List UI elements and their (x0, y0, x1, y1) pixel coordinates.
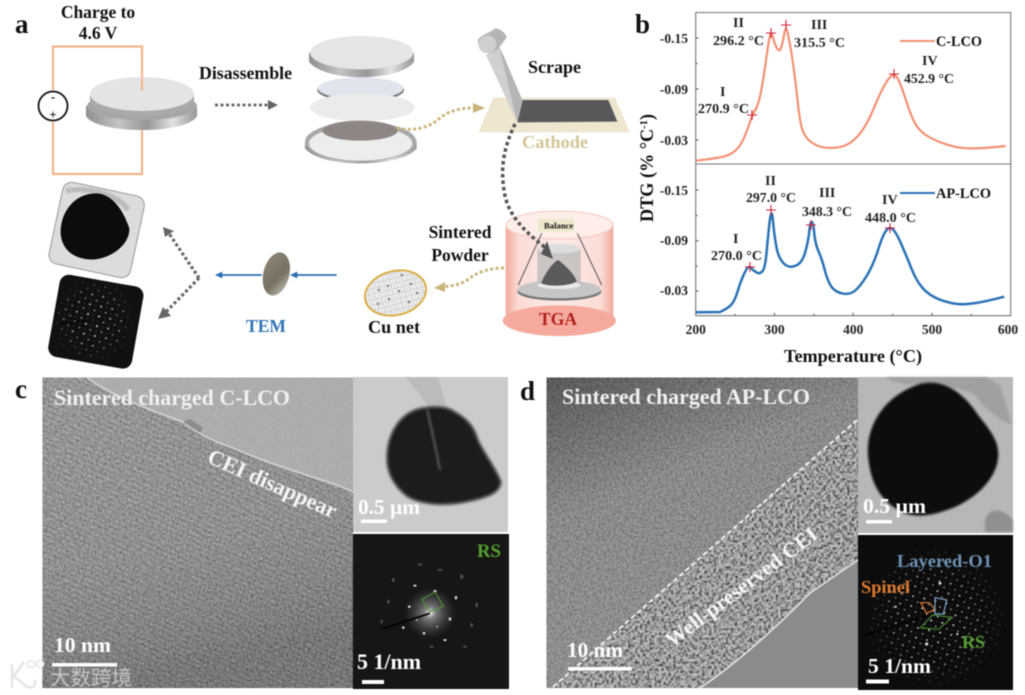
y axis title: ) (637, 114, 658, 120)
annotation: CEI disappear: CEI disappear (204, 444, 341, 523)
label: TEM: TEM (246, 316, 286, 336)
x axis labels: 500 (922, 322, 942, 337)
peak labels: C-LCO: II (733, 16, 744, 31)
inset: AP-LCO diffraction: 5 1/nm (868, 654, 931, 678)
caption: Sintered charged AP-LCO: Sintered charged AP-LCO (562, 385, 810, 409)
peak labels: AP-LCO: 348.3 °C (802, 205, 852, 220)
legend: AP-LCO: AP-LCO (936, 186, 991, 202)
label: Sintered Powder: Sintered (429, 222, 492, 242)
scale bar: 10 nm (52, 633, 117, 666)
peak markers (745, 20, 899, 272)
peak labels: C-LCO: 270.9 °C (698, 102, 749, 117)
axis ticks (696, 38, 971, 316)
arrow: powder to Cu net (434, 268, 504, 292)
peak labels: C-LCO: IV (922, 54, 938, 69)
peak labels: C-LCO: I (720, 85, 725, 100)
panel label d: d (520, 376, 535, 406)
inset: AP-LCO diffraction: Layered-O1 (897, 551, 992, 571)
inset: AP-LCO particle: 0.5 µm (863, 494, 927, 518)
y axis labels: -0.15 (660, 183, 688, 198)
peak labels: AP-LCO: IV (882, 193, 898, 208)
icon: voltage source (38, 89, 68, 122)
peak labels: AP-LCO: II (765, 174, 776, 189)
series: C-LCO curve (696, 29, 1006, 161)
annotation: Well-preserved CEI: Well-preserved CEI (661, 522, 822, 652)
y axis title: -1 (638, 120, 650, 129)
y axis labels: -0.03 (660, 133, 688, 148)
peak labels: AP-LCO: 270.0 °C (711, 249, 762, 264)
inset: AP-LCO diffraction: RS (962, 632, 985, 652)
icon: exploded coin cell (305, 36, 417, 163)
peak labels: AP-LCO: 448.0 °C (865, 211, 916, 226)
caption: Sintered charged C-LCO: Sintered charged C-LCO (54, 385, 290, 410)
watermark logo and text (12, 660, 132, 691)
icon: voltage source: - (51, 89, 55, 104)
peak labels: AP-LCO (711, 174, 916, 264)
panel: b DTG chart (635, 9, 1018, 367)
icon: Cu net (360, 264, 431, 322)
scale bar: 10 nm (567, 638, 632, 670)
label: Sintered Powder: Powder (431, 245, 489, 265)
x axis labels: 200 (686, 322, 706, 337)
label: Scrape: Scrape (528, 57, 581, 77)
y axis labels: -0.09 (660, 82, 688, 97)
y axis labels: -0.15 (660, 31, 688, 46)
arrows: TEM outputs (158, 227, 199, 319)
label: TGA: TGA (539, 309, 577, 329)
peak labels: C-LCO: 452.9 °C (904, 72, 954, 87)
scale bar: 10 nm: 10 nm (567, 638, 623, 662)
peak labels: AP-LCO: III (819, 186, 835, 201)
heading: Charge to 4.6 V: Charge to (61, 2, 135, 22)
circuit wire (53, 46, 142, 174)
peak labels: AP-LCO: 297.0 °C (746, 191, 796, 206)
legend: C-LCO: C-LCO (936, 34, 982, 50)
legend: C-LCO (900, 34, 982, 50)
icon: coin cell (86, 77, 197, 130)
x axis labels: 300 (764, 322, 785, 337)
peak labels: C-LCO: 296.2 °C (713, 34, 764, 49)
scale bar: 10 nm: 10 nm (54, 633, 111, 657)
icon: scraper and cathode sheet (478, 28, 630, 132)
icon: TGA instrument: Balance (544, 220, 573, 230)
peak labels: C-LCO (698, 16, 954, 117)
y axis labels: -0.03 (660, 283, 688, 298)
inset: C-LCO diffraction: 5 1/nm (357, 649, 421, 674)
panel: d AP-LCO micrographs (520, 376, 1013, 690)
legend: AP-LCO (900, 186, 991, 202)
y axis title: DTG (% °C (637, 125, 658, 222)
x axis title: Temperature (°C) (784, 346, 922, 367)
arrow: cathode to balance (503, 124, 553, 259)
x axis labels: 400 (843, 322, 864, 337)
micrograph: HRTEM AP-LCO (546, 378, 858, 688)
label: Sintered Powder (429, 222, 492, 265)
label: Cu net: Cu net (368, 317, 420, 337)
panel label b: b (635, 9, 650, 39)
inset: C-LCO particle: 0.5 µm (358, 495, 421, 519)
series: AP-LCO curve (696, 214, 1004, 312)
heading: Charge to 4.6 V: 4.6 V (79, 23, 118, 43)
icon: voltage source: + (49, 107, 57, 122)
x axis labels (686, 322, 1018, 337)
y axis labels: -0.09 (660, 233, 688, 248)
x axis labels: 600 (998, 322, 1018, 337)
icon: TGA instrument (503, 211, 616, 336)
icon: TEM beam and lens (215, 250, 337, 298)
y axis labels (660, 31, 688, 298)
watermark logo and text: 大数跨境 (50, 661, 132, 691)
inset: AP-LCO diffraction: Spinel (861, 577, 910, 597)
peak labels: C-LCO: III (811, 18, 827, 33)
label: Disassemble: Disassemble (199, 63, 292, 83)
panel: a workflow schematic (15, 2, 630, 370)
inset: AP-LCO diffraction (858, 535, 1013, 690)
arrow: cell to cathode (397, 103, 485, 129)
chart frame (696, 12, 1011, 316)
panel: c C-LCO micrographs (15, 374, 509, 689)
panel label a: a (15, 9, 29, 39)
thumbnail: TEM particle tile (47, 181, 146, 279)
thumbnail: diffraction tile (47, 273, 145, 370)
peak labels: C-LCO: 315.5 °C (794, 36, 845, 51)
micrograph: HRTEM C-LCO (42, 378, 353, 688)
inset: C-LCO particle (353, 377, 508, 532)
label: Cathode: Cathode (522, 132, 588, 152)
peak labels: AP-LCO: I (733, 232, 738, 247)
inset: C-LCO diffraction (353, 534, 509, 689)
panel label c: c (15, 374, 27, 404)
inset: C-LCO diffraction: RS (477, 541, 501, 562)
heading: Charge to 4.6 V (61, 2, 135, 43)
arrow: disassemble (215, 100, 278, 110)
inset: AP-LCO particle (858, 377, 1013, 533)
